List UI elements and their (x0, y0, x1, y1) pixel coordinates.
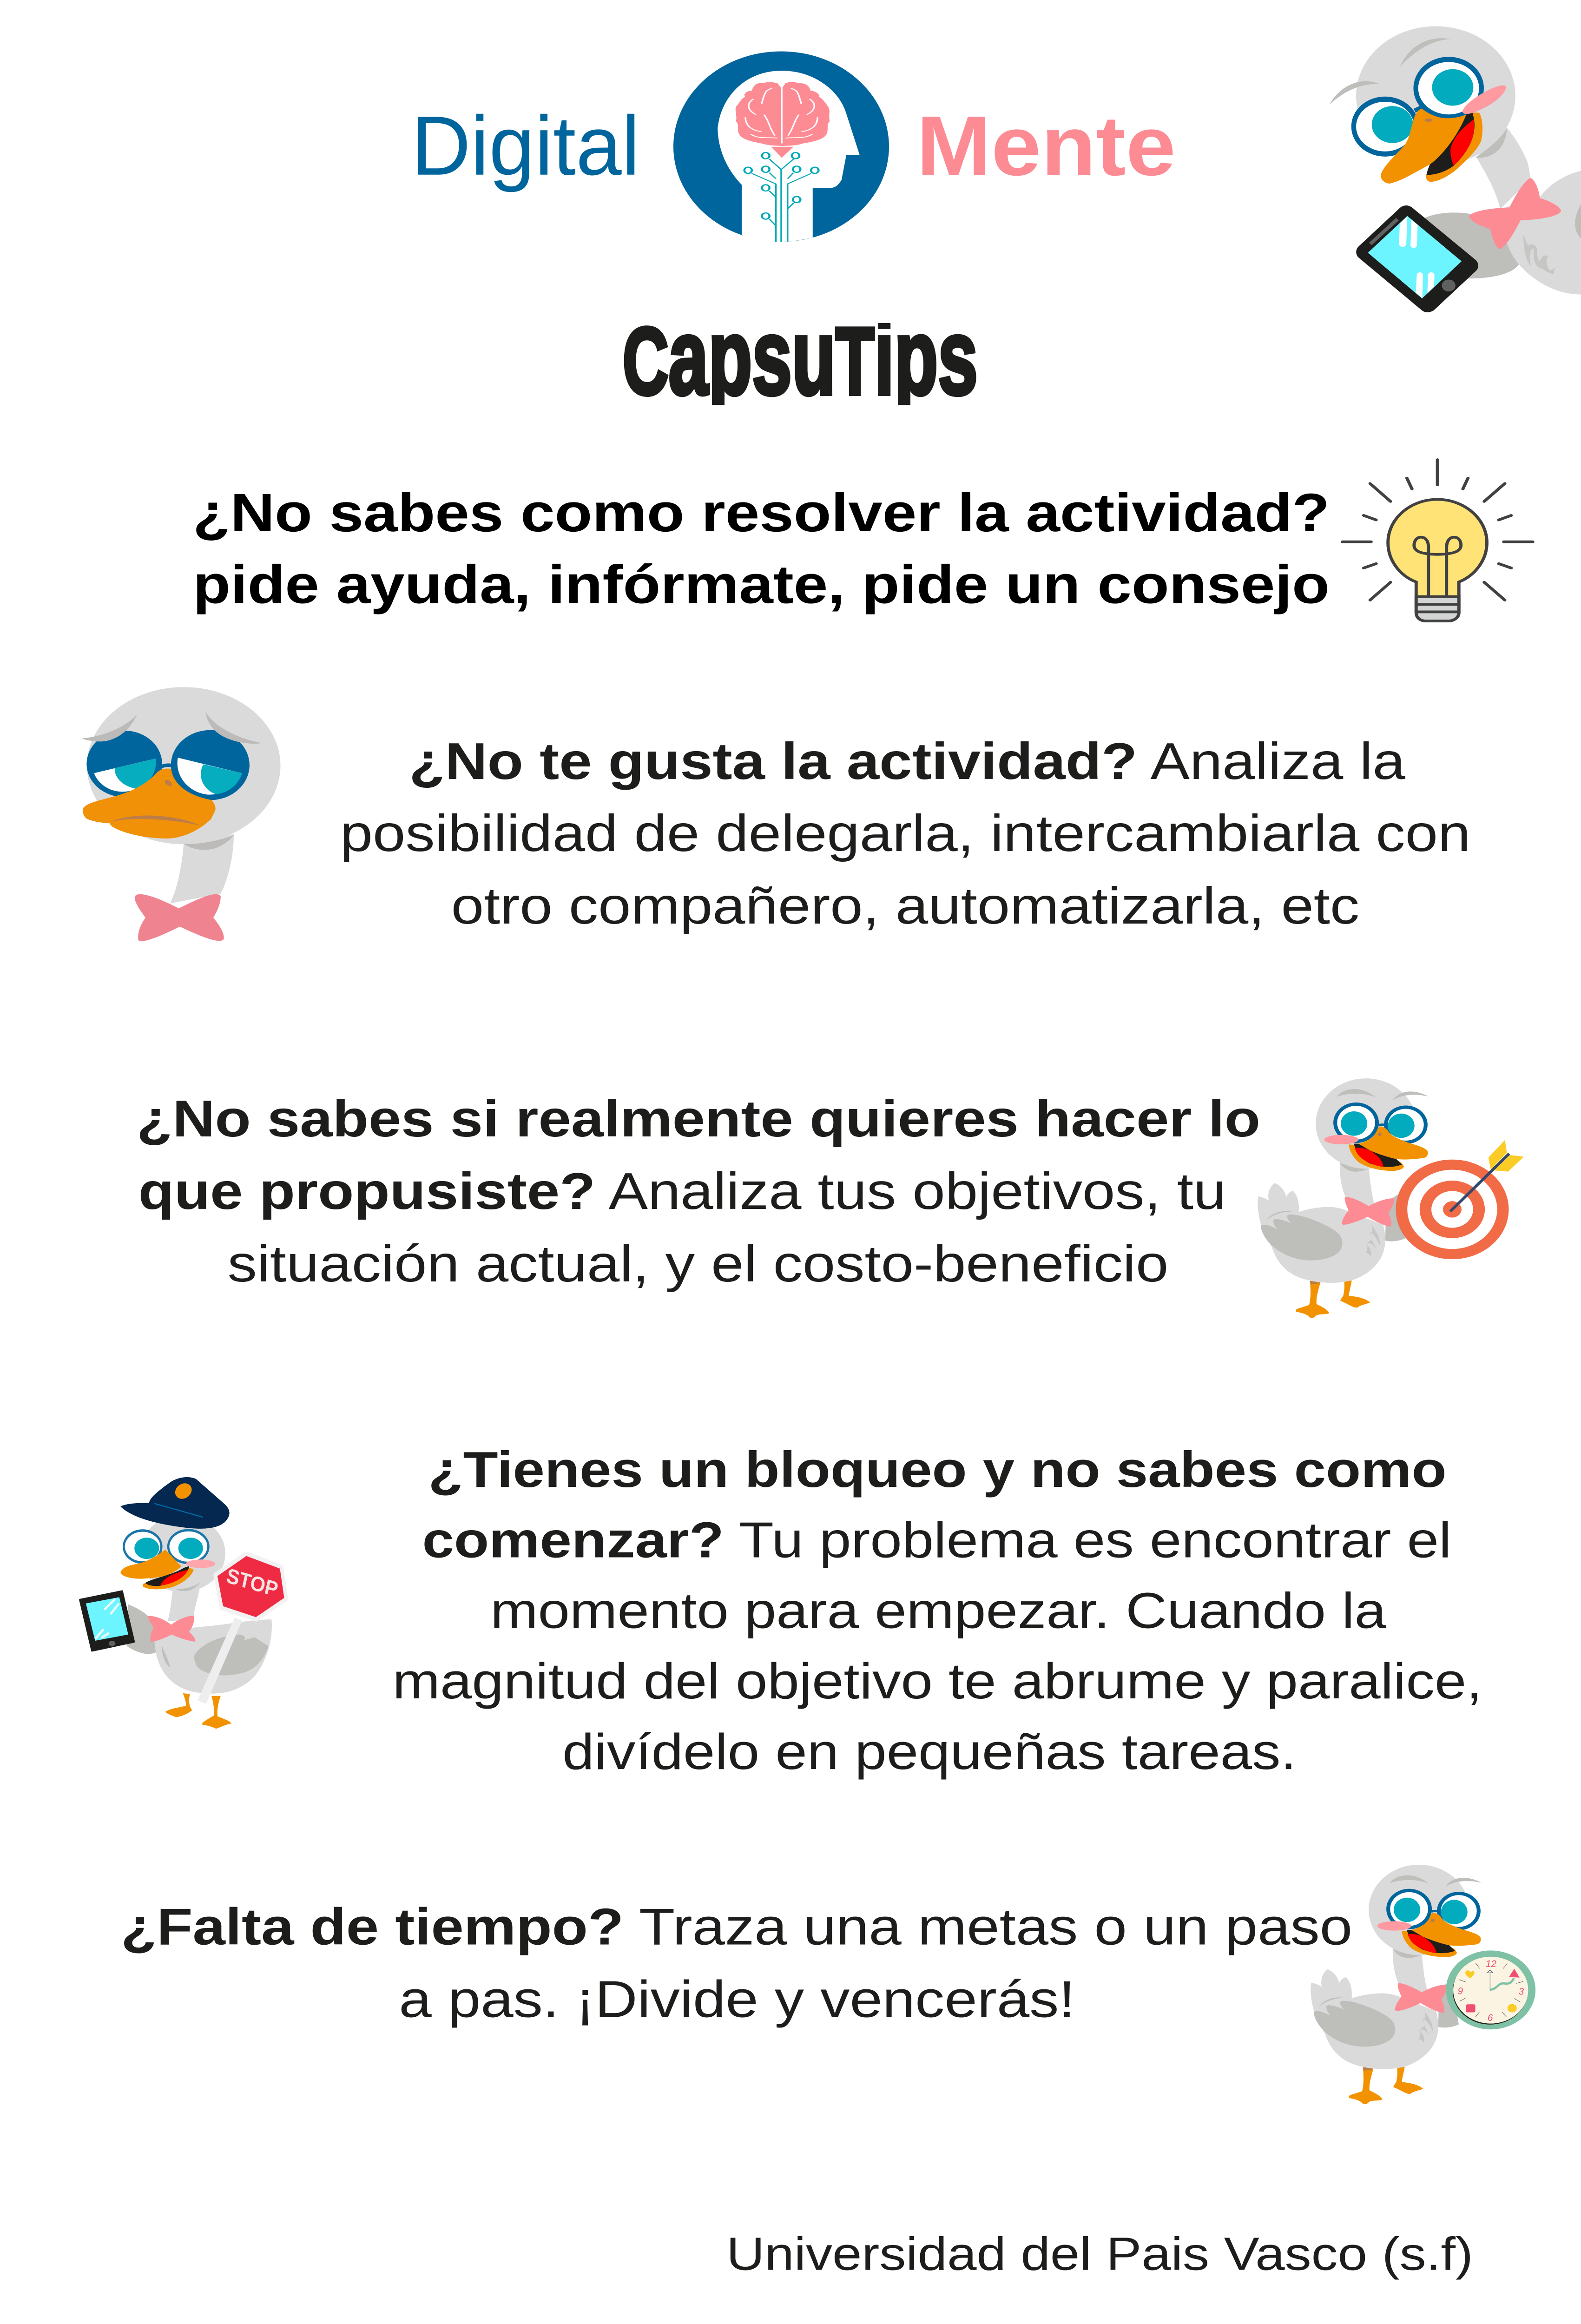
logo emblem: head with brain and circuit (673, 51, 889, 242)
illustration: duck with clock (1311, 1865, 1535, 2104)
icon: clock: 6 (1488, 2013, 1493, 2023)
text block: bloqueo: momento para empezar. Cuando la (490, 1582, 1386, 1639)
text block: ayuda: ¿No sabes como resolver la actividad? (193, 482, 1330, 543)
text block: bloqueo: divídelo en pequeñas tareas. (562, 1723, 1297, 1780)
illustration: sad duck (82, 687, 281, 941)
text block: objetivos: que propusiste? Analiza tus objetivos, tu (138, 1162, 1226, 1220)
icon: stop sign (198, 1554, 286, 1704)
icon: police cap (120, 1477, 230, 1529)
title: CapsuTips: CapsuTips (623, 297, 978, 417)
text block: objetivos (137, 1090, 1260, 1293)
text block: no te gusta: ¿No te gusta la actividad? Analiza la (409, 733, 1406, 790)
text block: bloqueo: magnitud del objetivo te abrume y paralice, (393, 1653, 1482, 1709)
icon: light bulb (1343, 460, 1533, 621)
illustration: duck with tablet (1330, 26, 1581, 312)
text block: bloqueo: comenzar? Tu problema es encontrar el (422, 1512, 1451, 1568)
icon: stop sign: STOP (224, 1564, 280, 1601)
icon: clock: 12 (1486, 1959, 1496, 1969)
text block: ayuda: pide ayuda, infórmate, pide un consejo (193, 555, 1330, 615)
logo word: Mente: Mente (916, 99, 1176, 193)
text block: bloqueo (393, 1441, 1482, 1780)
text block: falta de tiempo (121, 1898, 1352, 2028)
text block: bloqueo: ¿Tienes un bloqueo y no sabes como (428, 1441, 1447, 1498)
icon: clock (1446, 1950, 1535, 2029)
icon: tablet (1356, 205, 1478, 312)
source credit: Universidad del Pais Vasco (s.f) (726, 2228, 1473, 2280)
text block: no te gusta: posibilidad de delegarla, intercambiarla con (340, 805, 1470, 862)
logo word: Digital: Digital (411, 99, 640, 192)
text block: no te gusta (340, 733, 1470, 935)
icon: clock: 9 (1458, 1986, 1463, 1997)
logo: Digital Mente (411, 51, 1176, 242)
illustration: police duck with stop sign and tablet (80, 1477, 286, 1729)
text block: objetivos: situación actual, y el costo-beneficio (228, 1235, 1168, 1293)
icon: target with arrow (1396, 1140, 1524, 1259)
text block: ayuda (193, 482, 1330, 615)
icon: tablet (80, 1591, 134, 1651)
icon: clock: 3 (1519, 1987, 1524, 1997)
text block: falta de tiempo: a pas. ¡Divide y vencerás! (399, 1970, 1075, 2028)
illustration: duck with target (1258, 1078, 1524, 1318)
text block: objetivos: ¿No sabes si realmente quieres hacer lo (137, 1090, 1260, 1148)
text block: falta de tiempo: ¿Falta de tiempo? Traza una metas o un paso (121, 1898, 1352, 1956)
text block: no te gusta: otro compañero, automatizarla, etc (451, 877, 1359, 935)
